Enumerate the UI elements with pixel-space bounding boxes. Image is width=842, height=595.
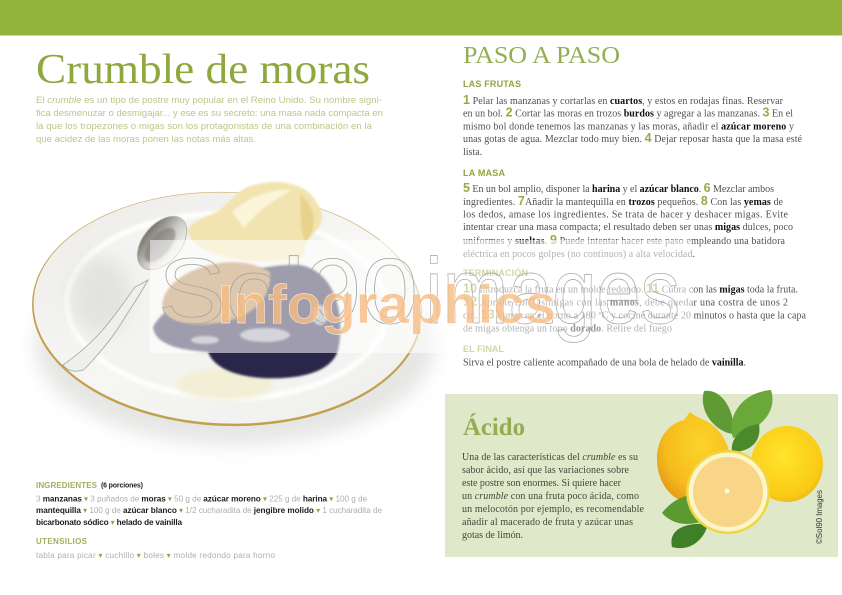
crumble topping	[162, 262, 270, 324]
step section: la masa: eléctrica en pocos golpes (no continuos) a alta velocidad.	[463, 249, 695, 260]
lemons illustration	[657, 390, 823, 548]
ácido text: un crumble con una fruta poco ácida, como	[462, 491, 639, 502]
leaf center	[732, 424, 759, 452]
step section: terminación: de migas obtenga un tono dorado. Retire del fuego	[463, 324, 672, 334]
header bar	[0, 0, 842, 36]
ácido text	[462, 452, 645, 541]
step section: las frutas: lista.	[463, 147, 482, 158]
step section: las frutas: en un bol. 2 Cortar las moras en trozos burdos y agregar a las manzanas. 3 En el	[463, 106, 793, 120]
step section: la masa: uniformes y sueltas. 9 Puede intentar hacer este paso empleando una batidora	[463, 233, 786, 247]
watermark: images	[425, 239, 680, 343]
photo credit: ©Sol90 Images	[815, 490, 824, 544]
heading: paso a paso: PASO A PASO	[463, 43, 620, 69]
right lemon	[751, 426, 823, 502]
step section: la masa: intentar crear una masa compacta; el resultado deben ser unas migas dulces, poco	[463, 222, 793, 233]
step section: la masa	[463, 168, 793, 260]
step section: terminación: TERMINACIÓN	[463, 267, 528, 278]
ácido text: sabor ácido, así que las variaciones sobre	[462, 465, 630, 476]
ácido text: Una de las características del crumble es su	[462, 452, 638, 463]
intro paragraph: que acidez de las moras ponen las notas más altas.	[36, 134, 256, 145]
watermark: Sol90	[158, 239, 418, 343]
step section: las frutas: mismo bol donde tenemos las manzanas y las moras, añadir el azúcar moreno y	[463, 122, 794, 132]
ingredients list: bicarbonato sódico ▾ helado de vainilla	[36, 518, 182, 527]
plate	[28, 185, 426, 433]
utensils list: tabla para picar ▾ cuchillo ▾ boles ▾ molde redondo para horno	[36, 551, 275, 560]
watermark: Infographics	[218, 273, 556, 335]
ingredients list: mantequilla ▾ 100 g de azúcar blanco ▾ 1/2 cucharadita de jengibre molido ▾ 1 cucharadita de	[36, 506, 382, 515]
intro paragraph: fica desmenuzar o desmigajar... y ese es su secreto: una masa nada compacta en	[36, 108, 383, 119]
step section: el final	[463, 344, 746, 368]
intro paragraph	[36, 95, 383, 145]
step section: la masa: los dedos, amase los ingredientes. Se trata de hacer y deshacer migas. Evite	[463, 210, 789, 220]
ice cream	[187, 182, 322, 261]
step section: terminación	[463, 267, 807, 334]
sauce	[177, 368, 273, 400]
panel: ácido	[445, 390, 838, 557]
heading: ácido: Ácido	[463, 413, 525, 441]
ácido text: gotas de limón.	[462, 530, 523, 541]
photo: plate of crumble with ice cream	[28, 182, 435, 445]
step section: las frutas: LAS FRUTAS	[463, 79, 521, 89]
step section: terminación: cm. 13 Ponga en el horno a 180 ºC y cocine durante 20 minutos o hasta que la capa	[463, 308, 807, 322]
ácido text: añadir al macerado de fruta y azúcar unas	[462, 517, 633, 528]
step section: las frutas: unas gotas de agua. Mezclar todo muy bien. 4 Dejar reposar hasta que la masa esté	[463, 131, 803, 145]
intro paragraph: la que los tropezones o migas son los protagonistas de una combinación en la	[36, 121, 373, 132]
step section: el final: Sirva el postre caliente acompañado de una bola de helado de vainilla.	[463, 358, 746, 368]
watermark	[150, 239, 692, 353]
step section: las frutas	[463, 79, 803, 158]
ácido text: un melocotón por ejemplo, es recomendable	[462, 504, 645, 515]
ácido text: este postre son enormes. Si quiere hacer	[462, 478, 622, 489]
step section: la masa: 5 En un bol amplio, disponer la harina y el azúcar blanco. 6 Mezclar ambos	[463, 181, 774, 195]
leaves top	[703, 391, 733, 434]
step section: terminación: 12 Apriete con las migas con las manos, debe quedar una costra de unos 2	[463, 294, 788, 308]
spoon	[63, 207, 196, 371]
step section: las frutas: 1 Pelar las manzanas y cortarlas en cuartos, y estos en rodajas finas. Reservar	[463, 93, 784, 107]
blackberries	[153, 265, 340, 378]
left lemon	[657, 412, 730, 503]
step section: el final: EL FINAL	[463, 344, 504, 354]
berry highlights	[191, 305, 328, 344]
ingredients list: INGREDIENTES	[36, 481, 98, 490]
ingredients list: (6 porciones)	[101, 482, 143, 490]
step section: terminación: 10 Introduzca la fruta en un molde redondo. 11 Cubra con las migas toda la fruta.	[463, 282, 798, 296]
step section: la masa: LA MASA	[463, 168, 506, 178]
lemon slice	[686, 450, 770, 534]
step section: la masa: ingredientes. 7Añadir la mantequilla en trozos pequeños. 8 Con las yemas de	[463, 194, 784, 208]
title: Crumble de moras	[36, 47, 370, 93]
ingredients list: 3 manzanas ▾ 3 puñados de moras ▾ 50 g de azúcar moreno ▾ 225 g de harina ▾ 100 g de	[36, 494, 367, 504]
utensils list: UTENSILIOS	[36, 537, 88, 546]
plate shadow	[35, 245, 435, 445]
leaves bottom	[662, 495, 704, 524]
intro paragraph: El crumble es un tipo de postre muy popular en el Reino Unido. Su nombre signi-	[36, 95, 382, 106]
ingredients list	[36, 481, 382, 527]
utensils list	[36, 537, 275, 560]
